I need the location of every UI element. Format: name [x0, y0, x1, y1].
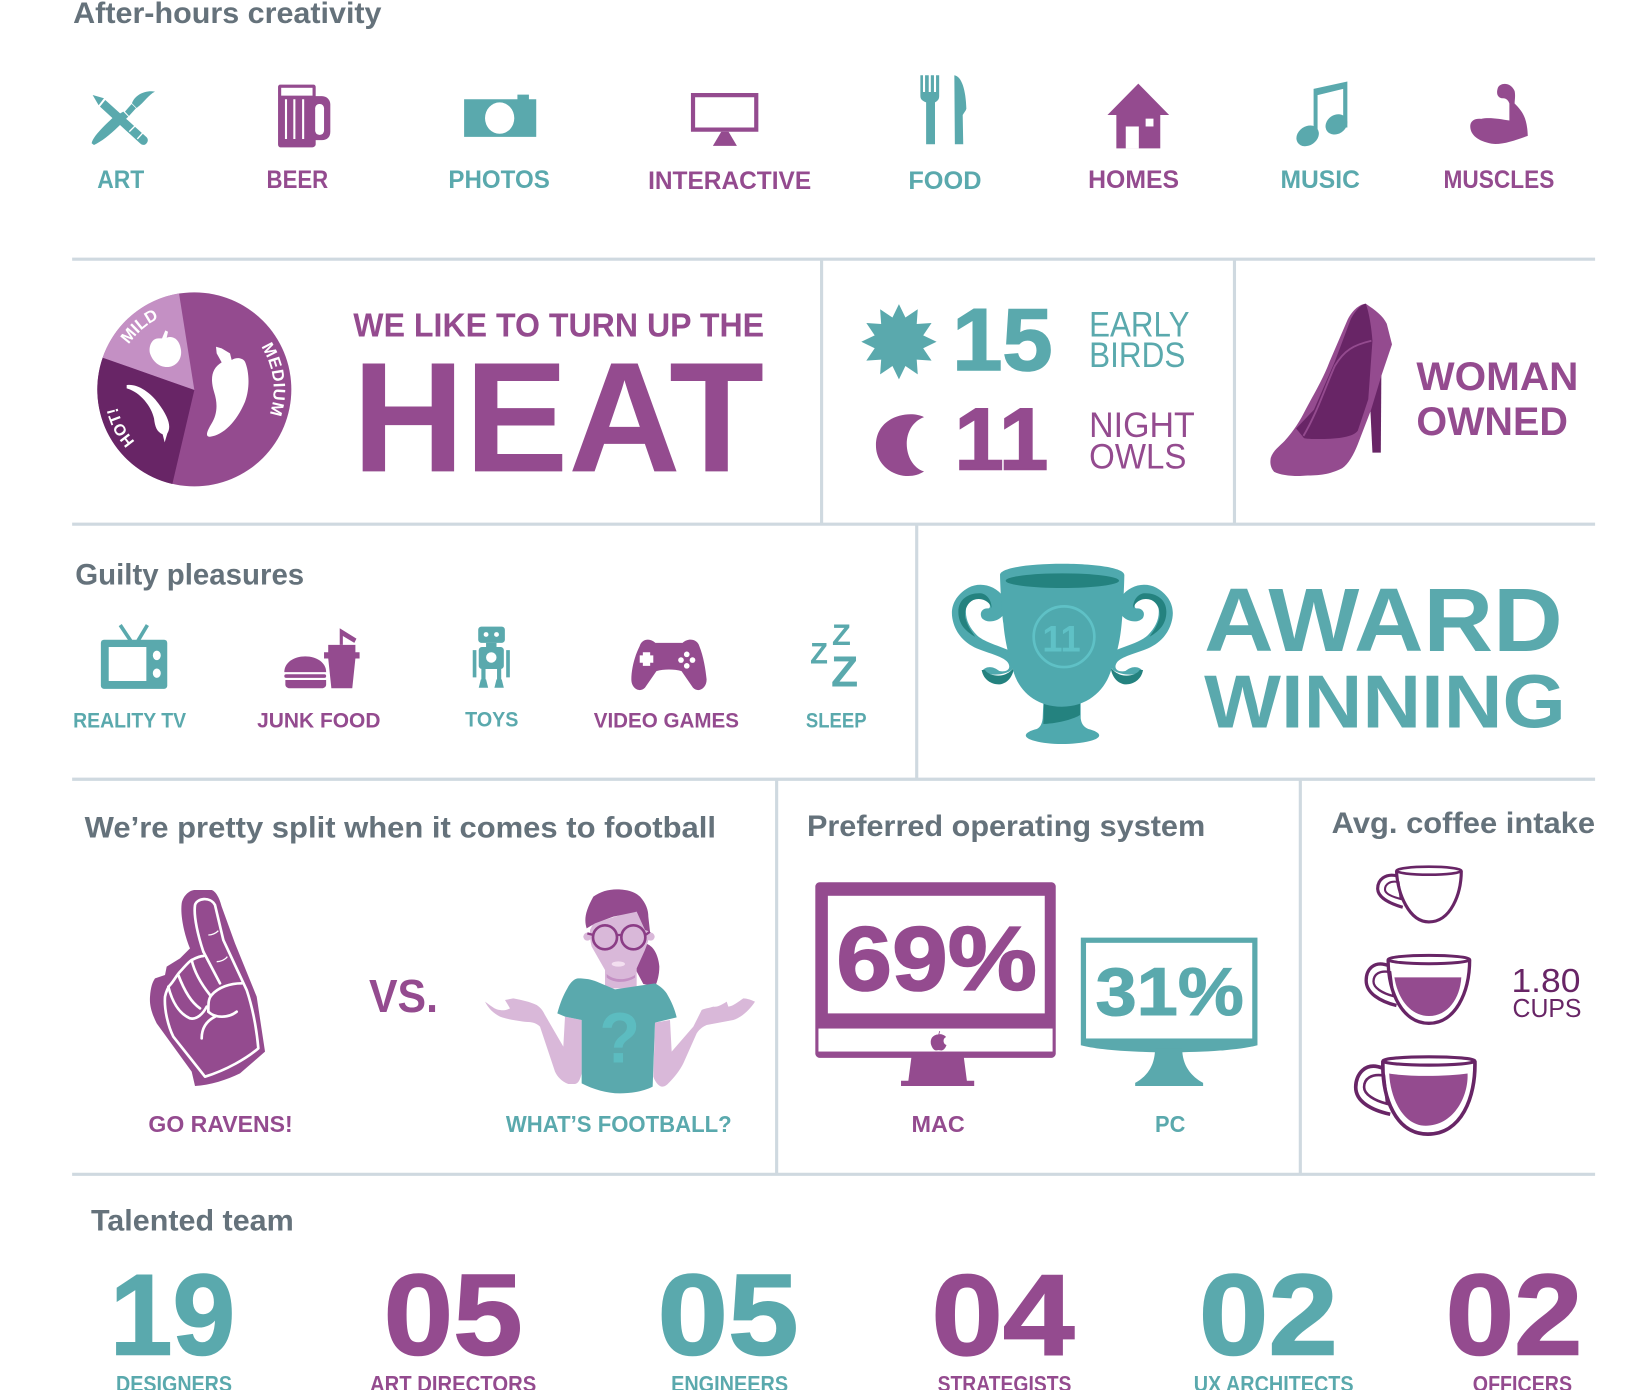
illustration: confused woman — [485, 889, 755, 1093]
stat: 05 engineers: 05 — [657, 1252, 799, 1380]
icon: pc monitor: 31% — [1095, 954, 1244, 1030]
icon: game controller — [631, 640, 707, 690]
illustration: confused woman: ? — [599, 999, 640, 1079]
icon: full cup — [1356, 1057, 1475, 1134]
panel: award winning — [952, 564, 1566, 744]
icon: trophy: 11 — [1042, 619, 1081, 660]
icon: foam finger — [150, 890, 265, 1086]
icon: junk food — [284, 628, 360, 688]
icon: music — [1292, 82, 1351, 150]
icon: tv — [101, 625, 167, 689]
heading: guilty pleasures: Guilty pleasures — [75, 559, 304, 591]
number: 11: 11 — [954, 390, 1048, 488]
icon: food — [920, 75, 966, 144]
icon: empty cup — [1378, 867, 1461, 922]
number: 15: 15 — [952, 291, 1053, 389]
panel: preferred operating system — [807, 811, 1257, 1137]
label: beer: BEER — [267, 166, 328, 194]
icon: half full cup — [1366, 955, 1470, 1023]
label: sleep: SLEEP — [806, 710, 867, 733]
panel: early birds and night owls — [861, 291, 1195, 488]
label: pc: PC — [1155, 1111, 1185, 1137]
stat: 04 strategists: 04 — [931, 1252, 1075, 1380]
stat: 02 ux architects: 02 — [1199, 1252, 1338, 1380]
label: video games: VIDEO GAMES — [594, 710, 739, 733]
headline: award winning — [1204, 571, 1566, 744]
headline: award winning: AWARD — [1204, 571, 1563, 671]
icon: muscles — [1470, 84, 1528, 144]
icon: sleep zzz: Z — [810, 639, 828, 671]
label: mac: MAC — [911, 1111, 965, 1137]
label: interactive: INTERACTIVE — [648, 167, 811, 195]
icon: robot toy — [475, 627, 508, 688]
panel: football split — [85, 812, 755, 1137]
label: early birds: EARLY — [1089, 305, 1190, 345]
heading: coffee intake: Avg. coffee intake — [1332, 808, 1595, 840]
label: music: MUSIC — [1280, 166, 1360, 194]
icon: sun — [861, 304, 937, 379]
label: art: ART — [97, 166, 145, 194]
label: night owls: OWLS — [1089, 436, 1186, 476]
label: 1.80 cups — [1511, 963, 1582, 1023]
icon: mac monitor — [815, 882, 1056, 1086]
label: 1.80 cups: CUPS — [1513, 993, 1582, 1023]
icon: beer — [278, 85, 330, 147]
stat: 19 designers: 19 — [110, 1252, 235, 1380]
pie chart: heat preferences: HOT! — [107, 408, 134, 448]
label: woman owned: WOMAN — [1416, 355, 1578, 399]
pie chart: heat preferences — [97, 292, 292, 486]
panel: talented team — [91, 1205, 1583, 1390]
icon: camera — [464, 95, 536, 137]
icon: sleep zzz: Z — [832, 620, 851, 652]
label: toys: TOYS — [465, 708, 519, 731]
label: food: FOOD — [908, 167, 982, 195]
headline: heat: HEAT — [352, 330, 764, 505]
heading: talented team: Talented team — [91, 1205, 294, 1237]
icon: sleep zzz — [810, 620, 858, 697]
icon: monitor — [691, 93, 758, 146]
label: homes: HOMES — [1088, 166, 1179, 194]
icon: art — [92, 91, 155, 145]
panel: coffee intake — [1332, 808, 1595, 1134]
label: go ravens: GO RAVENS! — [148, 1111, 293, 1137]
label: junk food: JUNK FOOD — [257, 710, 380, 733]
icon: homes — [1107, 84, 1169, 148]
label: woman owned — [1416, 355, 1578, 444]
icon: pc monitor — [1081, 938, 1257, 1086]
pie chart: heat preferences: MEDIUM — [262, 342, 286, 416]
label: early birds: BIRDS — [1089, 335, 1185, 375]
panel: after-hours creativity — [73, 0, 1554, 195]
panel: woman owned — [1270, 304, 1578, 476]
stat: 02 officers: 02 — [1446, 1252, 1583, 1380]
label: photos: PHOTOS — [448, 166, 550, 194]
pie chart: heat preferences: MILD — [120, 310, 156, 344]
icon: high heel — [1270, 304, 1392, 476]
icon: mac monitor: 69% — [836, 909, 1037, 1010]
icon: moon — [876, 414, 924, 476]
label: woman owned: OWNED — [1416, 400, 1568, 444]
panel: heat — [97, 292, 764, 505]
icon: sleep zzz: Z — [831, 648, 858, 697]
label: what's football: WHAT’S FOOTBALL? — [506, 1111, 732, 1137]
heading: football split: We’re pretty split when it comes to football — [85, 812, 716, 844]
label: night owls — [1089, 405, 1195, 476]
subheading: we like to turn up the: WE LIKE TO TURN UP THE — [353, 308, 764, 345]
label: early birds — [1089, 305, 1190, 375]
label: muscles: MUSCLES — [1444, 166, 1554, 194]
panel: guilty pleasures — [73, 559, 867, 733]
text: vs: VS. — [369, 970, 438, 1022]
label: night owls: NIGHT — [1089, 405, 1195, 445]
heading: preferred operating system: Preferred operating system — [807, 811, 1205, 843]
headline: award winning: WINNING — [1204, 660, 1566, 744]
stat: 05 art directors: 05 — [384, 1252, 523, 1380]
label: reality tv: REALITY TV — [73, 710, 186, 733]
icon: trophy — [952, 564, 1173, 744]
label: 1.80 cups: 1.80 — [1511, 963, 1580, 1000]
